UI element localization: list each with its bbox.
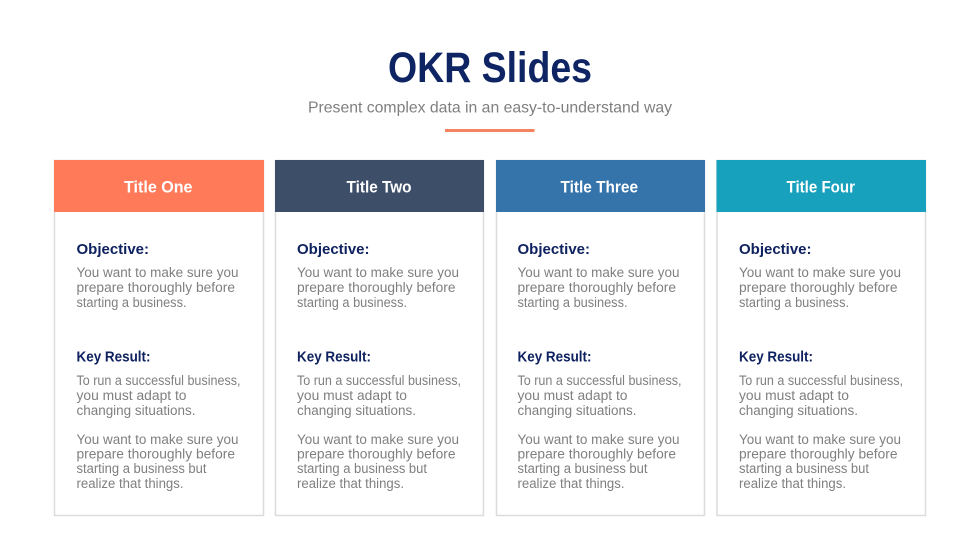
key result text: you must adapt to xyxy=(739,388,849,403)
header label: Title Three xyxy=(560,178,638,196)
key result text: you must adapt to xyxy=(518,388,628,403)
key result text: you must adapt to xyxy=(76,388,186,403)
objective text: starting a business. xyxy=(297,295,407,310)
key result text: To run a successful business, xyxy=(739,373,903,388)
key result text: starting a business but xyxy=(739,461,869,476)
objective text: starting a business. xyxy=(518,295,628,310)
key result text xyxy=(76,373,240,491)
key result heading: Key Result: xyxy=(76,348,150,366)
panel: title two xyxy=(275,160,484,516)
key result text: realize that things. xyxy=(518,476,624,491)
key result text: You want to make sure you xyxy=(518,432,680,447)
key result text: To run a successful business, xyxy=(518,373,682,388)
key result text: realize that things. xyxy=(297,476,404,491)
key result text: You want to make sure you xyxy=(739,432,901,447)
key result text: To run a successful business, xyxy=(76,373,240,388)
key result text: realize that things. xyxy=(76,476,184,491)
title: OKR Slides xyxy=(388,44,592,92)
objective text xyxy=(76,265,238,310)
header band xyxy=(496,160,705,212)
objective heading: Objective: xyxy=(297,241,370,258)
objective text: prepare thoroughly before xyxy=(518,280,676,295)
card outline xyxy=(276,160,484,516)
objective text: prepare thoroughly before xyxy=(297,280,456,295)
header band xyxy=(54,160,264,212)
key result text: changing situations. xyxy=(518,403,636,418)
panel: title one xyxy=(54,160,264,516)
header label: Title One xyxy=(124,178,192,196)
key result text xyxy=(739,373,903,491)
key result heading: Key Result: xyxy=(739,348,813,366)
key result text: starting a business but xyxy=(518,461,648,476)
objective text xyxy=(297,265,459,310)
key result text: starting a business but xyxy=(76,461,207,476)
objective text: starting a business. xyxy=(739,295,849,310)
key result text: changing situations. xyxy=(76,403,196,418)
objective heading: Objective: xyxy=(76,241,149,258)
objective text: You want to make sure you xyxy=(297,265,459,280)
panel: title four xyxy=(716,160,926,516)
objective text: starting a business. xyxy=(76,295,186,310)
panel: title three xyxy=(496,160,705,516)
key result text: changing situations. xyxy=(297,403,416,418)
key result text: changing situations. xyxy=(739,403,858,418)
header label: Title Two xyxy=(346,178,412,196)
key result text xyxy=(297,373,461,491)
key result heading: Key Result: xyxy=(297,348,371,366)
title underline accent xyxy=(445,129,534,132)
objective text: prepare thoroughly before xyxy=(76,280,235,295)
header label: Title Four xyxy=(786,178,855,196)
objective text: You want to make sure you xyxy=(76,265,238,280)
objective text: You want to make sure you xyxy=(739,265,901,280)
subtitle: Present complex data in an easy-to-understand way xyxy=(308,100,672,116)
card outline xyxy=(717,160,926,516)
objective text xyxy=(739,265,901,310)
key result text: prepare thoroughly before xyxy=(518,446,676,462)
key result text: prepare thoroughly before xyxy=(739,446,898,462)
header band xyxy=(275,160,484,212)
objective heading: Objective: xyxy=(518,241,590,258)
card outline xyxy=(54,160,264,516)
key result text: you must adapt to xyxy=(297,388,407,403)
header band xyxy=(716,160,926,212)
key result text: starting a business but xyxy=(297,461,427,476)
key result heading: Key Result: xyxy=(518,348,592,366)
card outline xyxy=(496,160,704,516)
objective text: You want to make sure you xyxy=(518,265,680,280)
key result text xyxy=(518,373,682,491)
key result text: realize that things. xyxy=(739,476,846,491)
key result text: You want to make sure you xyxy=(76,432,238,447)
objective text xyxy=(518,265,680,310)
objective heading: Objective: xyxy=(739,241,812,258)
key result text: prepare thoroughly before xyxy=(76,446,235,462)
objective text: prepare thoroughly before xyxy=(739,280,898,295)
key result text: To run a successful business, xyxy=(297,373,461,388)
key result text: prepare thoroughly before xyxy=(297,446,456,462)
key result text: You want to make sure you xyxy=(297,432,459,447)
